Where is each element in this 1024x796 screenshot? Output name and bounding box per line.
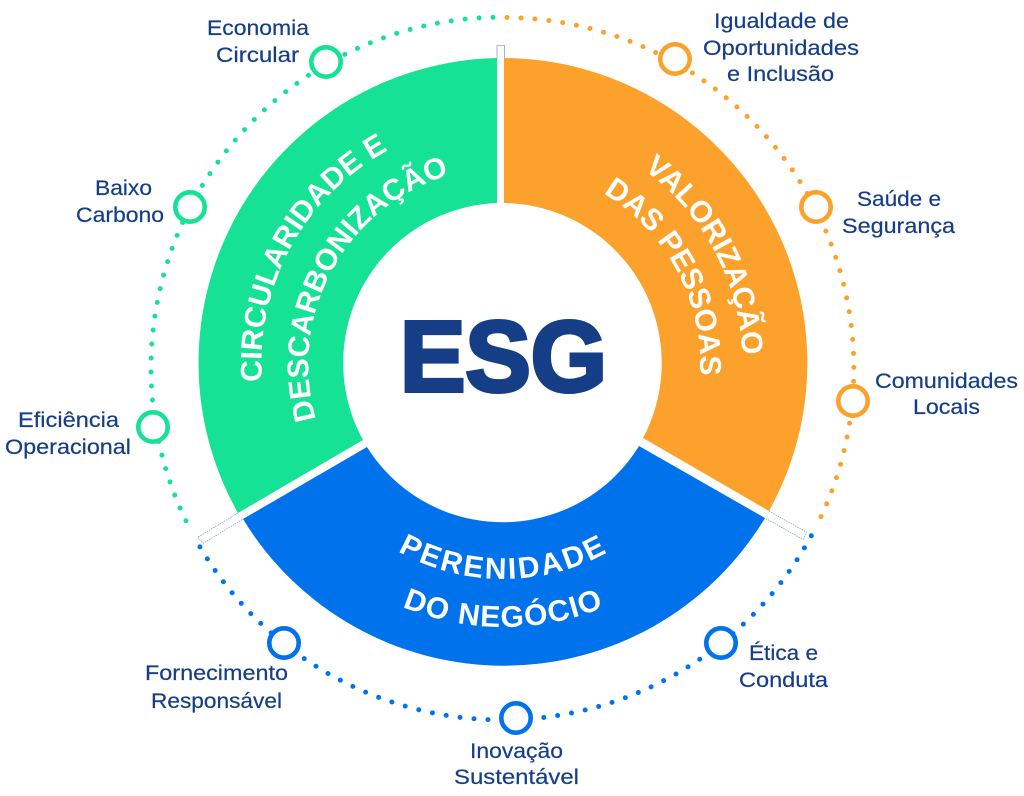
icon: ring inovação sustentável bbox=[501, 703, 531, 733]
dotted ring: green arc bbox=[151, 17, 493, 527]
heading: valorização das pessoas: DAS PESSOAS bbox=[605, 177, 722, 374]
label: comunidades locais: Comunidades bbox=[875, 369, 1018, 393]
label: economia circular: Economia bbox=[207, 16, 309, 40]
label: fornecimento responsável bbox=[145, 661, 288, 713]
label: saúde e segurança: Saúde e bbox=[857, 187, 941, 211]
label: ética e conduta: Ética e bbox=[749, 640, 818, 665]
label: economia circular bbox=[207, 16, 309, 67]
heading: perenidade do negócio: DO NEGÓCIO bbox=[404, 588, 600, 628]
heading: circularidade e descarbonização: DESCARBONIZAÇÃO bbox=[287, 158, 446, 422]
label: igualdade de oportunidades e inclusão: Oportunidades bbox=[703, 36, 859, 60]
label: fornecimento responsável: Responsável bbox=[151, 689, 282, 713]
label: baixo carbono: Carbono bbox=[76, 203, 164, 227]
label: eficiência operacional bbox=[5, 408, 131, 459]
icon: ring comunidades locais bbox=[838, 386, 868, 416]
label: saúde e segurança bbox=[842, 187, 955, 238]
heading: valorização das pessoas: VALORIZAÇÃO bbox=[650, 153, 766, 354]
label: inovação sustentável: Inovação bbox=[470, 739, 563, 763]
label: baixo carbono: Baixo bbox=[95, 176, 152, 200]
label: inovação sustentável bbox=[454, 739, 579, 789]
label: comunidades locais: Locais bbox=[913, 395, 980, 419]
label: inovação sustentável: Sustentável bbox=[454, 765, 579, 789]
label: ética e conduta bbox=[739, 640, 828, 692]
icon: ring baixo carbono bbox=[175, 192, 205, 222]
panel: circularidade e descarbonização segment bbox=[199, 58, 497, 513]
heading: perenidade do negócio bbox=[400, 534, 606, 628]
dotted ring: blue arc bbox=[196, 536, 811, 720]
icon: ring saúde e segurança bbox=[801, 192, 831, 222]
heading: perenidade do negócio: PERENIDADE bbox=[400, 534, 606, 579]
icon: ring eficiência operacional bbox=[138, 412, 168, 442]
label: economia circular: Circular bbox=[216, 43, 299, 67]
icon: ring igualdade de oportunidades bbox=[660, 44, 690, 74]
panel: perenidade do negócio segment bbox=[243, 446, 765, 666]
heading: circularidade e descarbonização: CIRCULARIDADE E bbox=[240, 133, 387, 381]
icon: ring fornecimento responsável bbox=[269, 628, 299, 658]
label: eficiência operacional: Operacional bbox=[5, 435, 131, 459]
dotted ring: orange arc bbox=[507, 18, 854, 523]
label: eficiência operacional: Eficiência bbox=[18, 408, 119, 432]
label: ética e conduta: Conduta bbox=[739, 668, 828, 692]
label: baixo carbono bbox=[76, 176, 164, 227]
icon: ring economia circular bbox=[311, 47, 341, 77]
title: ESG: ESG bbox=[400, 301, 607, 413]
label: igualdade de oportunidades e inclusão bbox=[703, 9, 859, 86]
label: igualdade de oportunidades e inclusão: Igualdade de bbox=[714, 9, 849, 33]
label: igualdade de oportunidades e inclusão: e Inclusão bbox=[727, 62, 834, 86]
segment outline tabs bbox=[198, 46, 807, 544]
label: comunidades locais bbox=[875, 369, 1018, 419]
icon: ring ética e conduta bbox=[706, 628, 736, 658]
panel: valorização das pessoas segment bbox=[504, 58, 807, 511]
label: fornecimento responsável: Fornecimento bbox=[145, 661, 288, 685]
label: saúde e segurança: Segurança bbox=[842, 214, 955, 238]
